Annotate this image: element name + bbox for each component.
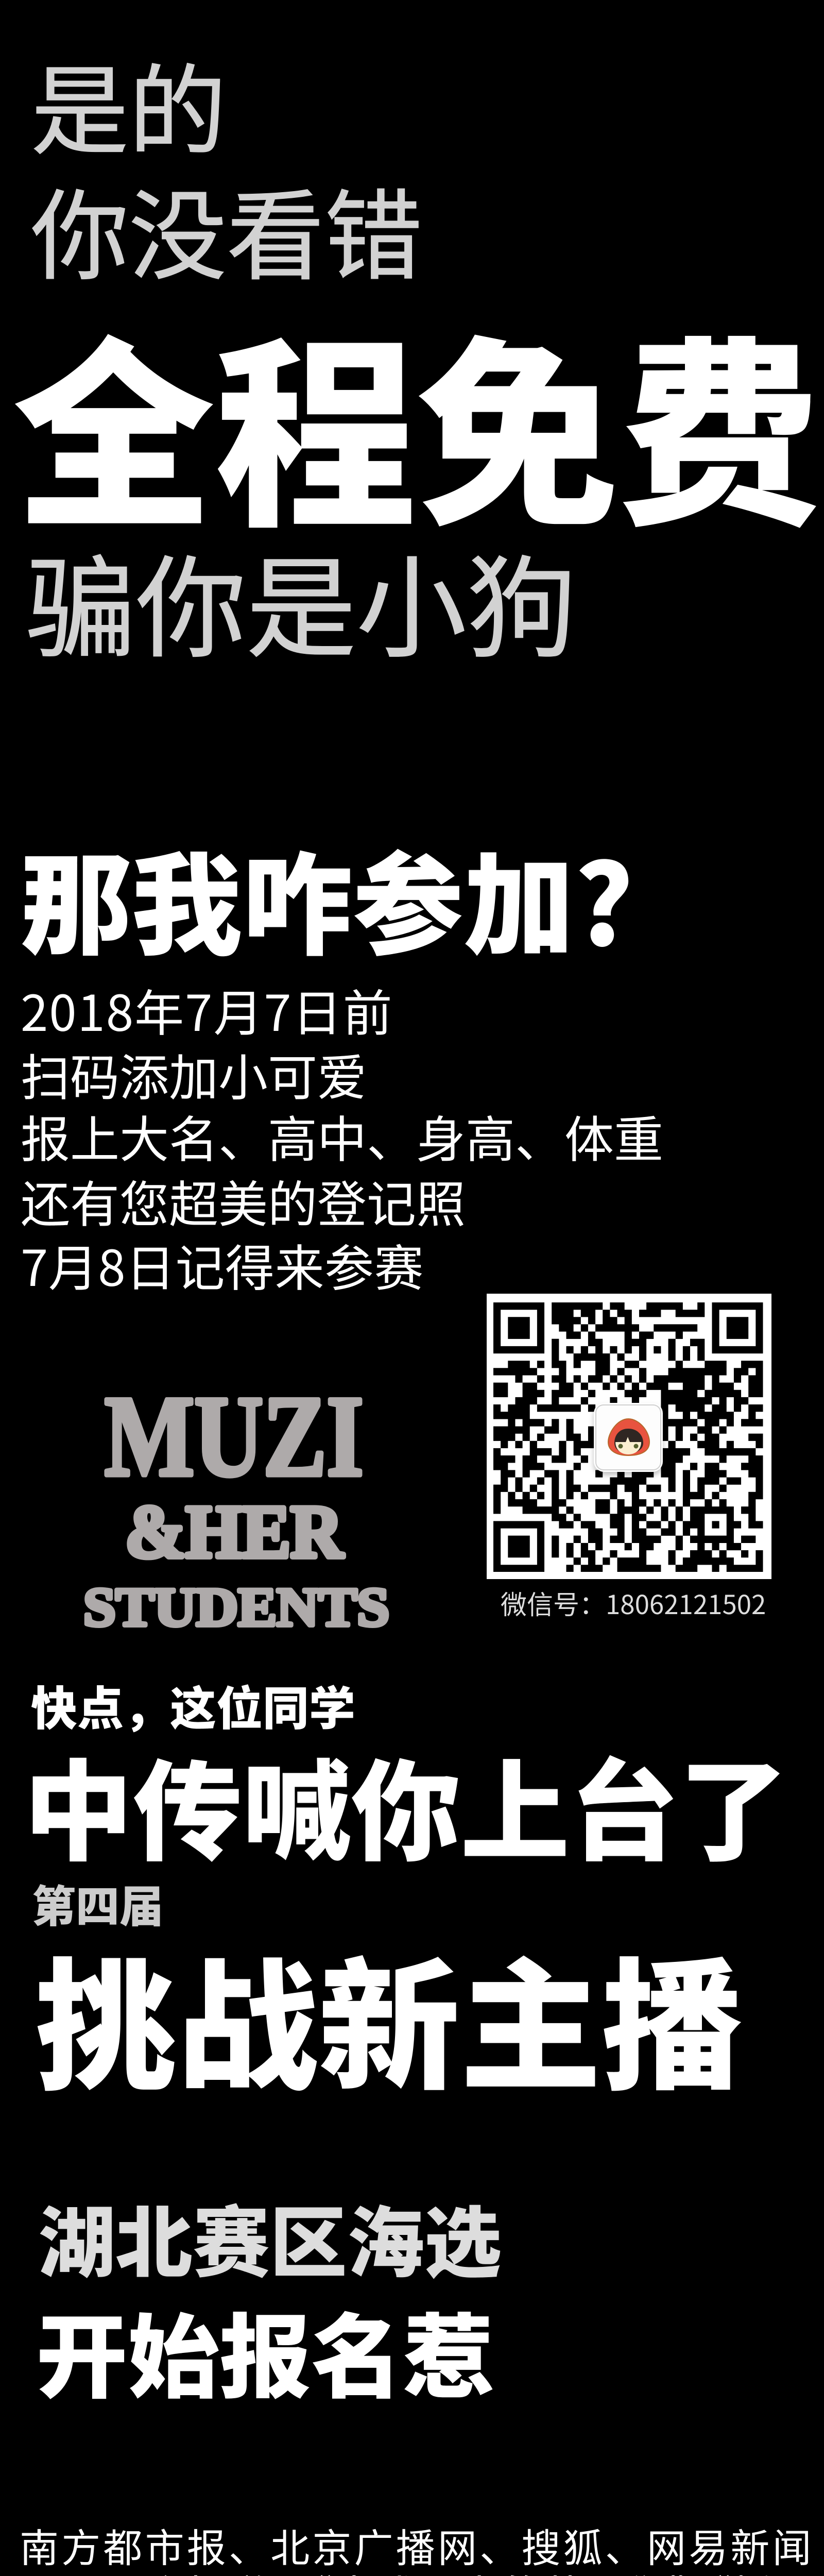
- text block: how to sign up: 2018年7月7日前: [21, 974, 393, 1045]
- headline: CUC calls you on stage: 中传喊你上台了: [24, 1725, 788, 1883]
- main title: completely free: 全程免费: [13, 274, 820, 567]
- heading: how to join: 那我咋参加?: [21, 817, 633, 977]
- subtitle line: 骗你是小狗: [26, 520, 577, 680]
- text block: how to sign up: [21, 974, 663, 1300]
- text block: how to sign up: 扫码添加小可爱: [21, 1038, 367, 1110]
- text block: how to sign up: 还有您超美的登记照: [21, 1165, 466, 1236]
- text block: media coverage: 南方都市报、北京广播网、搜狐、网易新闻: [20, 2517, 814, 2573]
- intro line: yes: 是的: [31, 32, 227, 174]
- QR code modules: [493, 1302, 763, 1572]
- WeChat ID caption: 微信号：18062121502: [501, 1584, 766, 1622]
- kicker: fourth edition: 第四届: [32, 1872, 163, 1935]
- QR code panel: [487, 1294, 771, 1579]
- heading: registration opens: 开始报名惹: [36, 2284, 494, 2417]
- logo: MUZI & her students: STUDENTS: [83, 1577, 389, 1637]
- headline: challenge new anchors: 挑战新主播: [35, 1913, 743, 2119]
- logo: MUZI & her students: [83, 1381, 389, 1637]
- intro line: you read it right: 你没看错: [31, 158, 422, 299]
- kicker: hurry up: 快点，这位同学: [31, 1671, 355, 1738]
- icon: girl in red hood: [595, 1404, 661, 1470]
- text block: how to sign up: 报上大名、高中、身高、体重: [21, 1100, 663, 1172]
- logo: MUZI & her students: &HER: [125, 1490, 344, 1573]
- QR centre avatar badge: [594, 1403, 663, 1472]
- heading: Hubei division auditions: 湖北赛区海选: [38, 2181, 502, 2293]
- text block: how to sign up: 7月8日记得来参赛: [21, 1229, 424, 1300]
